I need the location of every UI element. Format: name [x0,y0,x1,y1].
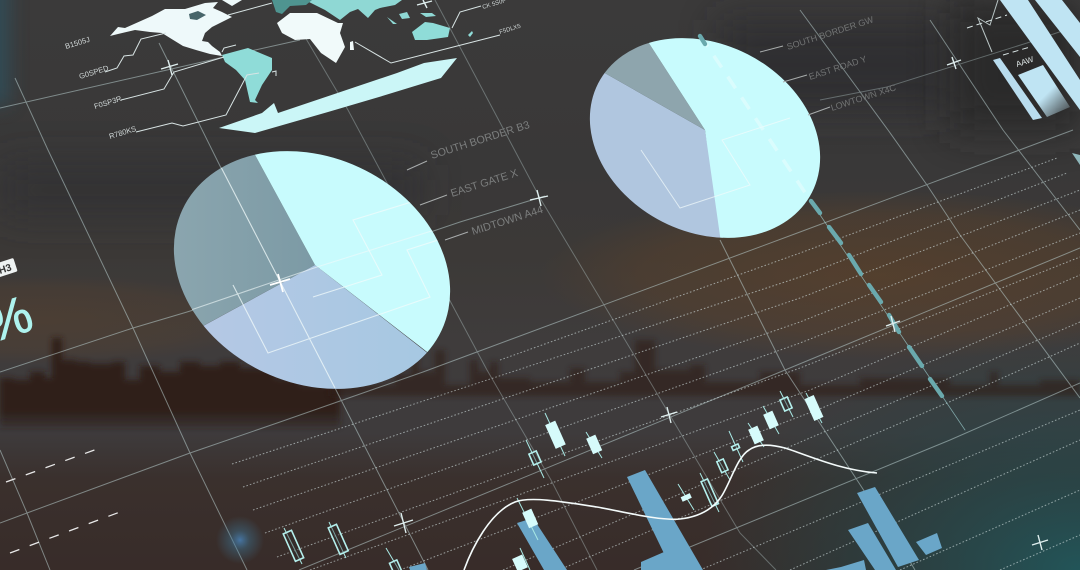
pie 2 labels: SOUTH BORDER GW [786,14,875,52]
map: Indonesia islands [387,12,436,24]
world map [110,0,473,133]
map: Middle East and Asia [305,0,402,20]
map leader lines [105,3,500,132]
map: Hudson Bay [189,11,206,20]
pie 1 leader lines [407,161,468,240]
percent readout [0,258,40,354]
map: Australia [412,22,450,40]
trend curve [464,445,877,570]
map labels: F0SP3R [93,94,123,111]
pie chart 2 [590,38,820,238]
pie 1 labels: SOUTH BORDER B3 [429,119,531,162]
blue bars [409,470,942,570]
top-right sparkline [978,0,998,52]
pie 2 labels: LOWTOWN X4C [830,82,898,113]
pie 2: lavender slice [590,73,723,238]
pie 1: centre cross [270,274,290,292]
candlestick chart [283,391,823,570]
map: Europe [272,0,312,14]
map: South America [222,48,272,103]
background: blurred skyline left [0,338,340,428]
map: New Zealand [468,31,473,37]
pie 2 labels [786,14,898,113]
pie 2: grey slice [604,43,705,130]
map labels: B1505J [64,35,91,51]
pie 1 labels [429,119,545,238]
map labels: F5DLX5 [499,24,522,36]
readout tag [0,258,18,279]
left dashed markers [6,448,128,553]
pie 1: lavender slice [204,265,427,389]
pie 1: overlay lines [192,168,438,388]
filled candles [512,395,823,570]
map: Africa [277,13,345,63]
map: Greenland [222,0,242,6]
top-right dashes [967,15,1030,55]
pie 1 labels: EAST GATE X [449,167,519,200]
pie chart 1 [174,151,450,389]
dashed teal axis [700,36,965,430]
map labels [64,0,522,141]
pie 2 labels: EAST ROAD Y [808,54,868,82]
top-right bar chart [967,0,1080,165]
pie 2: overlay lines [641,118,790,208]
pie 1: grey slice [174,154,315,326]
pie 1 labels: MIDTOWN A44 [470,204,545,238]
pie 1: cyan slice [255,151,450,352]
map labels: R780KS [108,124,137,141]
plus markers [161,0,1048,550]
lens flare [216,516,264,564]
pie 2: cyan slice [649,38,820,238]
dotted grid lines [232,158,1080,570]
map labels: G0SPED [78,63,110,81]
outlined candles [283,397,792,570]
pie 2 leader lines [760,46,830,115]
background: blurred skyline right [330,340,1080,396]
top-right edge tick [1072,153,1080,165]
map: Antarctica [219,58,457,133]
map: North America [110,2,232,56]
pie 2: dashes across pie [705,40,806,193]
map: Madagascar [350,41,354,50]
wicks [284,391,822,570]
top-right bar label: AAW [1015,55,1035,69]
top-right bars [993,58,1042,120]
